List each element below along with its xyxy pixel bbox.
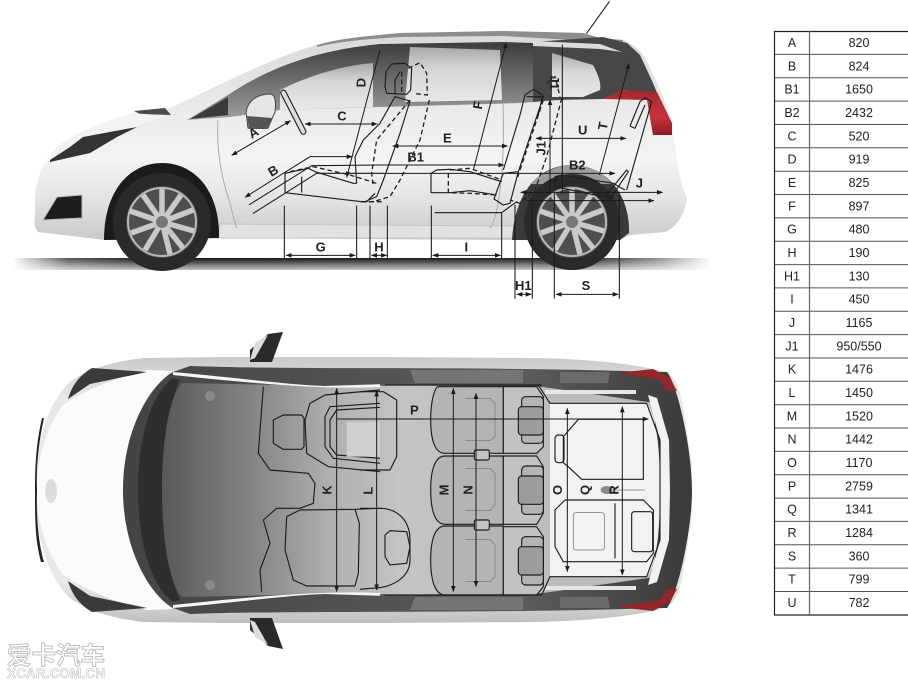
table row labels: H (787, 246, 797, 260)
cowl (134, 108, 171, 115)
watermark (7, 642, 105, 681)
bumper dark edges (35, 418, 44, 562)
rear quarter glass (552, 53, 600, 97)
lower front seat rear part (360, 508, 410, 589)
table row labels: J1 (785, 339, 799, 353)
third row upper seat (563, 419, 643, 479)
dimension H1: H1 (515, 278, 532, 293)
steering wheel area (273, 415, 304, 449)
dimension B1: B1 (407, 149, 424, 164)
dimension lines on side view, rear half (355, 2, 663, 298)
table row labels: 2432 (845, 106, 873, 120)
side view of car (12, 31, 712, 271)
dimension Q: Q (578, 485, 593, 495)
dimension A: A (246, 124, 262, 142)
dark cabin and rear surround (123, 366, 692, 614)
watermark: XCAR.COM.CN (7, 666, 105, 681)
table row labels: C (787, 129, 797, 143)
front wheel arch (104, 163, 219, 240)
dimension C (305, 108, 377, 124)
table row labels: 1442 (845, 433, 873, 447)
front quarter glass (190, 97, 228, 119)
lower front headrest (385, 531, 410, 565)
windscreen dot bottom (205, 580, 215, 590)
table row labels: A (788, 36, 797, 50)
tail light bottom (617, 589, 677, 611)
table row labels: N (787, 433, 797, 447)
third row back (627, 98, 652, 190)
dimension T (595, 63, 629, 175)
dimension J1 (534, 45, 562, 195)
seat belt strap fill (283, 93, 303, 132)
third row seat inner (573, 513, 604, 550)
table row labels: 897 (849, 199, 869, 213)
dimension B (245, 157, 352, 197)
second row dashed back (510, 77, 562, 203)
front seat back (355, 97, 410, 202)
dimension M: M (437, 485, 452, 495)
table row labels: 2759 (845, 479, 873, 493)
table row labels: S (788, 549, 796, 563)
table row labels: 799 (849, 573, 869, 587)
rear door glass (405, 47, 502, 102)
headlight (50, 127, 137, 162)
dimension U (536, 123, 626, 138)
dimension E: E (443, 131, 452, 146)
second row cushion (431, 169, 502, 195)
rear white crescent (648, 395, 670, 585)
table row labels: 950/550 (836, 339, 882, 353)
table row labels: 360 (849, 549, 869, 563)
table row labels: D (787, 153, 797, 167)
dimension T: T (595, 121, 611, 131)
dimension G (284, 206, 357, 259)
rear arch highlight (530, 165, 612, 184)
dimension H1 (515, 205, 532, 298)
dimension S: S (582, 278, 591, 293)
third row divider (613, 503, 617, 558)
dimension E (393, 131, 508, 146)
table row labels: 1284 (845, 526, 873, 540)
tailgate dark panel (533, 37, 657, 102)
table row labels: 1450 (845, 386, 873, 400)
dimension R: R (607, 485, 622, 495)
dimension S (554, 193, 619, 298)
table row labels: O (787, 456, 797, 470)
table row labels: F (788, 199, 796, 213)
top view of car (35, 332, 692, 649)
rear rail bottom (545, 586, 636, 590)
front cushion outline (285, 168, 375, 202)
rear wheel arch (512, 165, 629, 240)
dimension K: K (320, 485, 335, 495)
table row labels: 782 (849, 596, 869, 610)
seat outlines of middle row (431, 387, 503, 595)
table row labels: I (790, 293, 794, 307)
table row labels: B1 (784, 83, 800, 97)
seat belt strap (283, 93, 303, 132)
dimension P: P (410, 403, 419, 418)
windscreen dot top (205, 391, 215, 401)
table column divider (808, 31, 810, 615)
headrests of middle row (518, 397, 543, 585)
B1 and B2 leader arrows (249, 165, 383, 213)
table row labels: P (788, 479, 796, 493)
dimension L: L (361, 487, 376, 495)
table row labels: L (789, 386, 796, 400)
table row labels: 1165 (846, 316, 872, 330)
table row labels (784, 36, 882, 610)
table row labels: 825 (849, 176, 869, 190)
top mirror (250, 332, 283, 362)
top mirror cap (250, 335, 268, 360)
side windows frame (187, 42, 560, 120)
table row labels: Q (787, 503, 797, 517)
table frame (774, 32, 908, 615)
front seat dashed cushion (290, 167, 383, 202)
rear side panel bottom (560, 597, 610, 608)
upper front seat centre (347, 422, 380, 457)
table row labels: 1341 (845, 503, 873, 517)
top headlight (68, 368, 147, 399)
table row labels: M (787, 409, 797, 423)
windscreen lower band (138, 378, 180, 602)
dashboard outline (258, 387, 315, 592)
tail light top (617, 369, 677, 391)
cushion seat joints (474, 450, 489, 530)
rear rail top (545, 390, 636, 394)
dimension J1: J1 (547, 75, 562, 90)
side door sill (218, 224, 515, 238)
table grid (774, 54, 908, 591)
front door line (218, 103, 503, 228)
table row labels: 820 (849, 36, 869, 50)
bottom mirror (250, 618, 283, 649)
rear wheel (524, 174, 620, 270)
dimension H (370, 206, 387, 259)
side view body (34, 31, 687, 240)
table row labels: 1170 (846, 456, 872, 470)
table row labels: B2 (784, 106, 800, 120)
third row cushion (555, 175, 625, 197)
white rail bottom (173, 592, 385, 608)
dimension D: D (354, 78, 369, 87)
front seat dashed outline (360, 63, 429, 202)
dimension F (470, 43, 506, 170)
bottom headlight (68, 581, 147, 612)
third row upper headrest (555, 435, 564, 463)
dimension B: B (265, 162, 281, 180)
cabin outline edges (380, 385, 542, 595)
dimension B1 (383, 149, 504, 165)
dimension G: G (316, 239, 326, 254)
front wheel (113, 173, 211, 271)
third row headrest (632, 512, 653, 552)
table row labels: H1 (784, 269, 800, 283)
dimension J1: J1 (534, 141, 549, 156)
third row slab (605, 170, 628, 198)
lower front seat (285, 508, 380, 586)
tail light (603, 90, 672, 135)
seat backs of middle row (503, 387, 543, 595)
watermark: 爱卡汽车 (7, 642, 105, 670)
side window bottom (410, 597, 523, 610)
top view body (35, 357, 692, 623)
table row labels: 130 (849, 269, 869, 283)
table row labels: 480 (849, 223, 869, 237)
side window top (410, 370, 523, 383)
dimension U: U (578, 123, 587, 138)
second row back (503, 89, 543, 172)
upper front seat rear part (360, 392, 397, 470)
second row dashed cushion (448, 168, 502, 195)
roof interior (162, 383, 655, 597)
dimension N: N (460, 485, 475, 495)
table row labels: 520 (849, 129, 869, 143)
table row labels: J (789, 316, 795, 330)
table row labels: 919 (849, 153, 869, 167)
table row labels: E (788, 176, 796, 190)
dimension H: H (374, 239, 384, 254)
table row labels: R (787, 526, 797, 540)
front fog lamp (43, 195, 82, 220)
roof rail (317, 31, 623, 47)
dimension C: C (337, 108, 347, 123)
dimension B2: B2 (569, 157, 586, 172)
white rail top (173, 372, 385, 388)
bonnet crease (70, 113, 167, 152)
table row labels: 450 (849, 293, 869, 307)
dimension A (232, 121, 291, 155)
badge (45, 479, 57, 503)
dimension I (431, 202, 517, 259)
dimension O: O (550, 485, 565, 495)
top view line art, front half (258, 387, 380, 592)
boot outline (538, 385, 660, 595)
third row lower seat (555, 500, 653, 562)
front door glass (280, 63, 373, 110)
table row labels: 824 (849, 59, 869, 73)
dimension J: J (636, 175, 643, 190)
dimensions table (774, 31, 908, 615)
antenna (587, 2, 609, 33)
table row labels: K (788, 363, 797, 377)
table row labels: 1520 (845, 409, 873, 423)
upper front seat outer (305, 390, 380, 472)
oval marker (601, 486, 645, 494)
table row labels: T (788, 573, 796, 587)
wing mirror base (247, 116, 272, 129)
dimension lines on side view, front half (232, 50, 383, 259)
ground shadow (12, 258, 712, 270)
table row labels: B (788, 59, 796, 73)
boot floor (550, 403, 660, 577)
table row labels: 1476 (845, 363, 873, 377)
dimension I: I (465, 239, 468, 254)
table row labels: 1650 (845, 83, 873, 97)
table row labels: G (787, 223, 797, 237)
table row labels: U (787, 596, 797, 610)
front seat headrest (385, 63, 412, 94)
table row labels: 190 (849, 246, 869, 260)
top view line art, rear half (337, 385, 660, 595)
dimension F: F (470, 100, 486, 110)
rear side panel top (560, 372, 610, 383)
bonnet (37, 370, 173, 610)
roof highlight strip (533, 41, 622, 52)
bottom mirror cap (250, 620, 268, 645)
second row lower slab (494, 172, 518, 205)
dimension D (347, 50, 380, 177)
wing mirror (246, 94, 275, 128)
upper front seat inner (325, 403, 380, 463)
